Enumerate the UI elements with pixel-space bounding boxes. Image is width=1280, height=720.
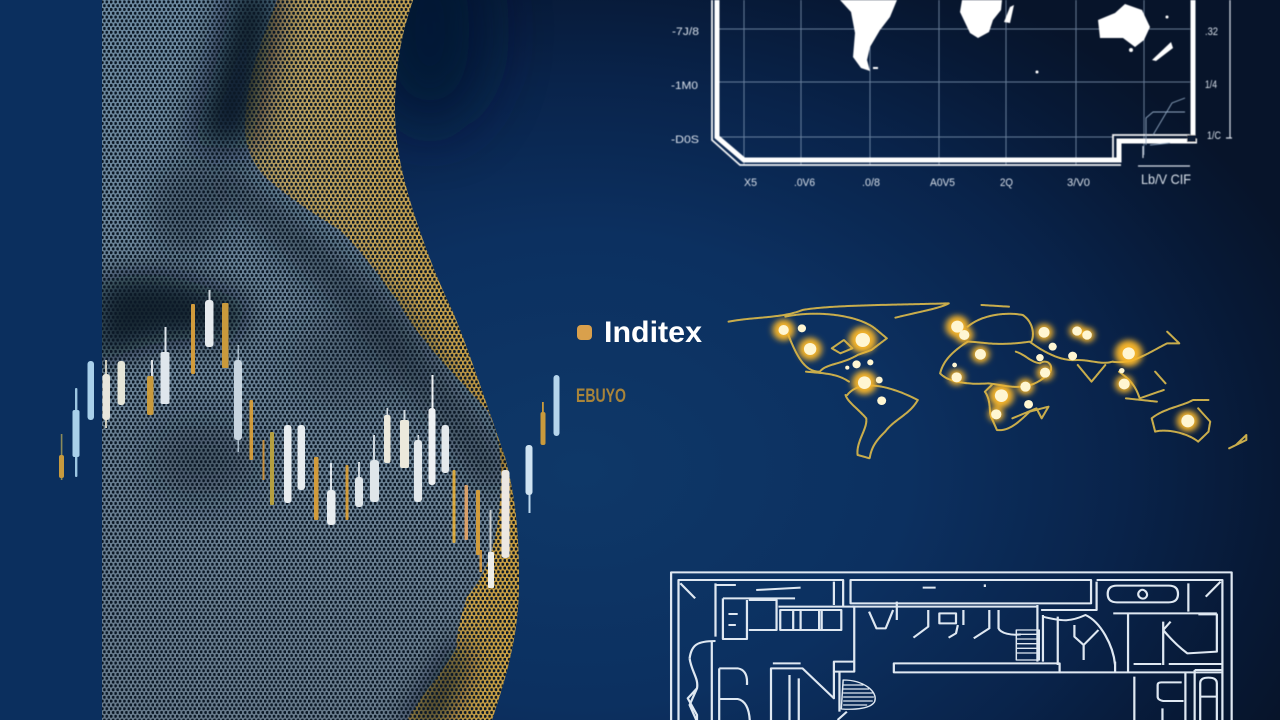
long counter <box>894 663 1060 672</box>
brand bullet <box>577 325 592 340</box>
bottom right rooms <box>1134 670 1222 720</box>
continents <box>840 0 1173 74</box>
axis labels: .0/8 <box>862 177 880 189</box>
axis labels: 2Q <box>1000 177 1013 189</box>
small gold label: EBUYO <box>576 386 626 407</box>
shadow beside fabric <box>370 0 490 130</box>
map frame <box>717 0 1197 160</box>
blueprint world map <box>671 0 1232 189</box>
axis labels: X5 <box>744 177 757 189</box>
grey fabric area <box>102 0 532 720</box>
top right fixture <box>1108 586 1178 602</box>
continent outlines <box>729 303 1246 458</box>
store glow halos <box>773 315 1199 432</box>
lower left rooms <box>688 641 750 720</box>
top corridor room <box>851 580 1091 603</box>
gold fabric area <box>245 0 540 720</box>
axis labels: -7J/8 <box>672 26 699 38</box>
stair hatch <box>1016 630 1039 660</box>
central wall and fixtures <box>834 582 1097 672</box>
axis labels: 1/C <box>1207 130 1221 142</box>
left upper room <box>716 583 801 639</box>
map grid <box>717 0 1190 165</box>
glowing store map <box>729 303 1246 458</box>
right rooms <box>1043 583 1222 672</box>
outer walls <box>671 572 1232 720</box>
candlestick chart <box>59 290 560 588</box>
fabric shading <box>95 0 515 720</box>
shelving <box>778 582 854 630</box>
left background strip <box>0 0 102 720</box>
door swing <box>771 663 847 720</box>
axis labels: .0V6 <box>794 177 815 189</box>
axis labels: 1/4 <box>1205 79 1217 91</box>
store dots <box>778 321 1194 427</box>
axis labels: .32 <box>1205 26 1218 38</box>
inset mini chart <box>1146 98 1185 145</box>
floor plan blueprint <box>671 572 1232 720</box>
axis labels: A0V5 <box>930 177 955 189</box>
fabric mesh panel <box>95 0 540 720</box>
mesh holes <box>102 0 532 720</box>
axis labels: -D0S <box>671 134 699 146</box>
scale rule <box>1138 0 1232 166</box>
axis labels: -1M0 <box>671 80 698 92</box>
brand name: Inditex <box>604 316 702 349</box>
hatched door <box>841 680 875 709</box>
axis labels: Lb/V CIF <box>1141 171 1191 187</box>
brand label: Inditex <box>577 316 702 349</box>
axis labels: 3/V0 <box>1067 177 1090 189</box>
axis labels <box>671 26 1221 189</box>
